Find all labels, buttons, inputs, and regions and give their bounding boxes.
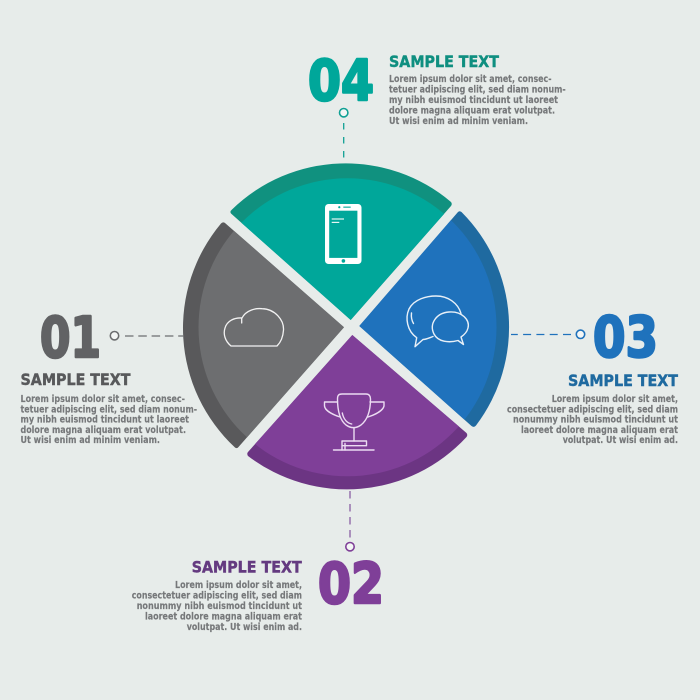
heading 03: SAMPLE TEXT (568, 371, 678, 390)
segment: teal (230, 163, 452, 320)
text block 02: Lorem ipsum dolor sit amet, (175, 580, 302, 591)
text block 04: tetuer adipiscing elit, sed diam nonum- (389, 84, 566, 96)
segment: blue (359, 211, 510, 427)
connector: 04 (340, 108, 348, 160)
connector: 01 (110, 332, 184, 340)
number 03: 03 (593, 306, 658, 370)
number 02: 02 (318, 552, 384, 617)
segment: grey (183, 222, 344, 448)
text block 04: Lorem ipsum dolor sit amet, consec- (389, 74, 552, 85)
icon: smartphone (325, 204, 362, 264)
callout 04 (308, 49, 566, 160)
number 04: 04 (308, 49, 374, 114)
text block 02: consectetuer adipiscing elit, sed diam (132, 590, 302, 602)
connector: 03 (511, 330, 585, 338)
text block 01 (20, 394, 197, 446)
heading 01: SAMPLE TEXT (20, 370, 131, 389)
heading 04: SAMPLE TEXT (389, 52, 499, 71)
text block 04: Ut wisi enim ad minim veniam. (389, 116, 528, 127)
segment: purple (247, 335, 468, 490)
icon: speech bubbles (407, 296, 468, 347)
icon: cloud (224, 309, 284, 346)
text block 04 (389, 74, 566, 127)
text block 02: laoreet dolore magna aliquam erat (145, 612, 302, 622)
heading 02: SAMPLE TEXT (192, 557, 302, 576)
connector: 02 (346, 491, 354, 551)
number 01: 01 (40, 306, 101, 371)
pie chart (183, 163, 509, 489)
text block 04: dolore magna aliquam erat volutpat. (389, 106, 555, 116)
text block 02: nonummy nibh euismod tincidunt ut (137, 601, 302, 612)
icon: trophy (324, 394, 384, 450)
text block 04: my nibh euismod tincidunt ut laoreet (389, 95, 558, 106)
text block 01: my nibh euismod tincidunt ut laoreet (20, 415, 189, 426)
text block 02 (132, 580, 302, 633)
callout 02 (132, 491, 384, 633)
text block 01: tetuer adipiscing elit, sed diam nonum- (20, 404, 197, 415)
text block 01: dolore magna aliquam erat volutpat. (20, 425, 186, 436)
text block 02: volutpat. Ut wisi enim ad. (187, 622, 302, 633)
text block 03 (507, 394, 678, 446)
text block 01: Ut wisi enim ad minim veniam. (20, 435, 160, 446)
text block 01: Lorem ipsum dolor sit amet, consec- (20, 394, 185, 405)
callout 03 (507, 306, 678, 446)
callout 01 (20, 306, 197, 446)
